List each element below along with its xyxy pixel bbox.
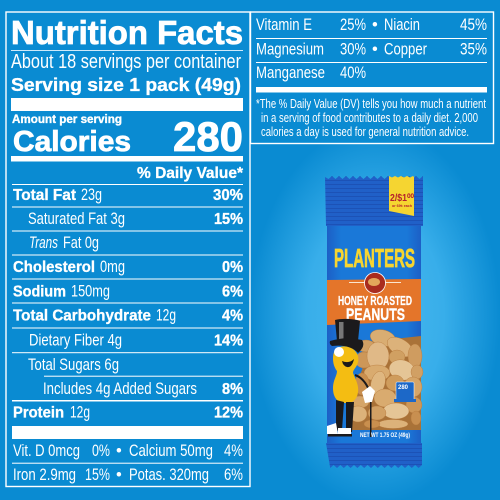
row: cholesterol: 0mg: [100, 258, 125, 276]
serving badge: [394, 382, 416, 402]
price flag: 2/$1⁰⁰: [390, 193, 414, 204]
row: dietary fiber: [29, 332, 243, 350]
brand name: PLANTERS: [334, 243, 415, 273]
panel: vitamins and footnote: [250, 12, 494, 144]
row: vitamin d and calcium: Vit. D 0mcg: [13, 442, 80, 460]
package body: [327, 225, 421, 447]
row: iron and potassium: •: [116, 466, 122, 484]
price flag: or 69¢ each: [392, 203, 413, 208]
row: total carbohydrate: 12g: [156, 306, 176, 324]
row: sodium: Sodium: [13, 284, 66, 300]
row: vitamin e and niacin: [256, 16, 487, 34]
servings per container: About 18 servings per container: [11, 50, 241, 73]
row: added sugars: 8%: [222, 381, 243, 398]
amount per serving: Amount per serving: [12, 114, 122, 126]
background glow behind package: [251, 125, 500, 500]
row: trans fat: Fat 0g: [63, 234, 99, 252]
row: vitamin e and niacin: 45%: [460, 16, 487, 34]
row: total sugars: Total Sugars 6g: [28, 356, 119, 374]
orange flavor band: [327, 279, 421, 325]
row: total carbohydrate: 4%: [222, 308, 243, 324]
row: vitamin e and niacin: •: [372, 16, 378, 34]
nutrient rows: [12, 184, 243, 484]
row: saturated fat: [28, 210, 243, 228]
row: added sugars: Includes 4g Added Sugars: [43, 380, 197, 398]
row: total carbohydrate: [13, 306, 243, 324]
row: total fat: 23g: [81, 186, 102, 204]
row: cholesterol: 0%: [222, 259, 243, 276]
row: iron and potassium: Iron 2.9mg: [13, 466, 76, 484]
serving badge: 280: [398, 385, 409, 391]
row: vitamin e and niacin: Niacin: [384, 16, 420, 34]
row: protein: 12%: [214, 404, 243, 422]
row: iron and potassium: Potas. 320mg: [129, 466, 209, 484]
row: dietary fiber: Dietary Fiber 4g: [29, 332, 122, 350]
flavor name: HONEY ROASTED: [338, 294, 412, 308]
row: vitamin d and calcium: •: [116, 442, 122, 460]
row: magnesium and copper: 35%: [460, 40, 487, 58]
row: manganese: 40%: [340, 64, 366, 82]
bottom crimp: [326, 443, 422, 468]
row: total fat: 30%: [213, 187, 243, 204]
row: iron and potassium: [13, 466, 243, 484]
row: total carbohydrate: Total Carbohydrate: [13, 308, 151, 324]
row: magnesium and copper: •: [372, 40, 378, 58]
net weight: NET WT 1.75 OZ (49g): [360, 433, 410, 439]
row: trans fat: Trans: [29, 234, 58, 252]
row: manganese: Manganese: [256, 64, 325, 82]
row: vitamin e and niacin: 25%: [340, 16, 366, 34]
mascot: [327, 319, 375, 437]
row: saturated fat: 15%: [214, 211, 243, 228]
panel: nutrition facts: [6, 12, 250, 486]
row: magnesium and copper: Copper: [384, 40, 427, 58]
row: vitamin d and calcium: 4%: [224, 442, 243, 460]
row: total fat: Total Fat: [13, 187, 76, 204]
flavor name: PEANUTS: [346, 305, 405, 324]
row: vitamin e and niacin: Vitamin E: [256, 16, 312, 34]
calories value: 280: [173, 113, 243, 160]
row: saturated fat: Saturated Fat 3g: [28, 210, 125, 228]
row: vitamin d and calcium: [13, 442, 243, 460]
row: vitamin d and calcium: Calcium 50mg: [129, 442, 213, 460]
row: vitamin d and calcium: 0%: [92, 442, 110, 460]
row: trans fat: [29, 234, 99, 252]
row: iron and potassium: 6%: [224, 466, 243, 484]
row: cholesterol: [13, 258, 243, 276]
row: iron and potassium: 15%: [85, 466, 110, 484]
row: protein: Protein: [13, 404, 64, 422]
flavor name: [338, 294, 412, 324]
row: cholesterol: Cholesterol: [13, 259, 95, 276]
price flag: [389, 176, 414, 216]
honey logo: [349, 272, 401, 294]
title: Nutrition Facts: [11, 15, 243, 52]
row: magnesium and copper: [256, 40, 487, 58]
row: sodium: 6%: [222, 284, 243, 300]
row: total fat: [13, 186, 243, 204]
row: dietary fiber: 14%: [214, 332, 243, 350]
daily value header: % Daily Value*: [137, 165, 244, 182]
product package: [325, 176, 423, 468]
peanuts pile: [349, 327, 423, 430]
row: magnesium and copper: Magnesium: [256, 40, 324, 58]
row: protein: [13, 404, 243, 422]
calories label: Calories: [13, 126, 131, 158]
serving size: Serving size 1 pack (49g): [11, 74, 241, 95]
top crimp: [325, 176, 423, 226]
row: magnesium and copper: 30%: [340, 40, 366, 58]
row: sodium: 150mg: [71, 282, 110, 300]
footnote: [256, 97, 486, 139]
row: sodium: [13, 282, 243, 300]
row: protein: 12g: [70, 404, 90, 422]
